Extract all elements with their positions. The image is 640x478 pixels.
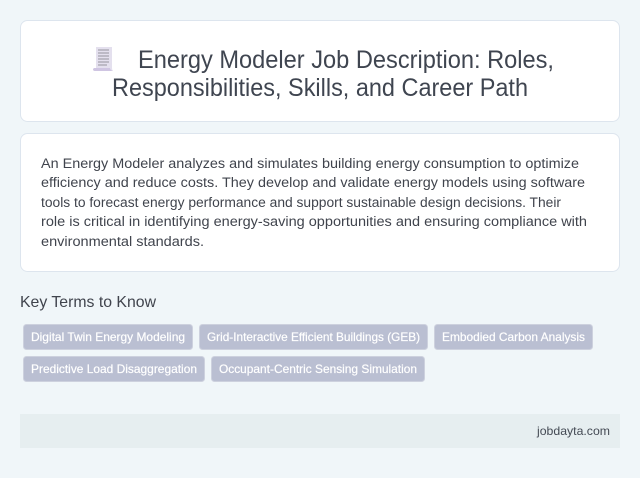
description text <box>41 156 587 250</box>
tag: occupant-centric <box>212 356 424 382</box>
tag: GEB <box>200 324 428 350</box>
footer source: jobdayta.com <box>536 424 610 438</box>
tag: predictive load: Predictive Load Disaggregation <box>31 362 197 376</box>
icon: document scroll <box>93 47 113 71</box>
tag: predictive load <box>24 356 204 382</box>
description text: environmental standards. <box>41 234 204 250</box>
description text: role is critical in identifying energy-saving opportunities and ensuring compliance with <box>41 214 587 230</box>
footer <box>20 414 620 448</box>
tag: embodied carbon: Embodied Carbon Analysis <box>442 330 585 344</box>
tag: GEB: Grid-Interactive Efficient Buildings (GEB) <box>207 330 420 344</box>
title: Responsibilities, Skills, and Career Path <box>112 74 528 102</box>
panel: description <box>20 134 620 272</box>
tag: occupant-centric: Occupant-Centric Sensing Simulation <box>219 362 417 376</box>
tags <box>24 324 592 382</box>
tag: digital twin: Digital Twin Energy Modeling <box>31 330 185 344</box>
title: Energy Modeler Job Description: Roles, <box>138 46 554 74</box>
title <box>112 46 554 102</box>
description text: tools to forecast energy performance and support sustainable design decisions. Their <box>41 195 561 211</box>
heading: key terms: Key Terms to Know <box>20 294 156 311</box>
title panel <box>20 20 620 122</box>
description text: An Energy Modeler analyzes and simulates building energy consumption to optimize <box>41 156 579 172</box>
tag: embodied carbon <box>434 324 592 350</box>
description text: efficiency and reduce costs. They develop and validate energy models using software <box>41 175 585 191</box>
tag: digital twin <box>24 324 192 350</box>
